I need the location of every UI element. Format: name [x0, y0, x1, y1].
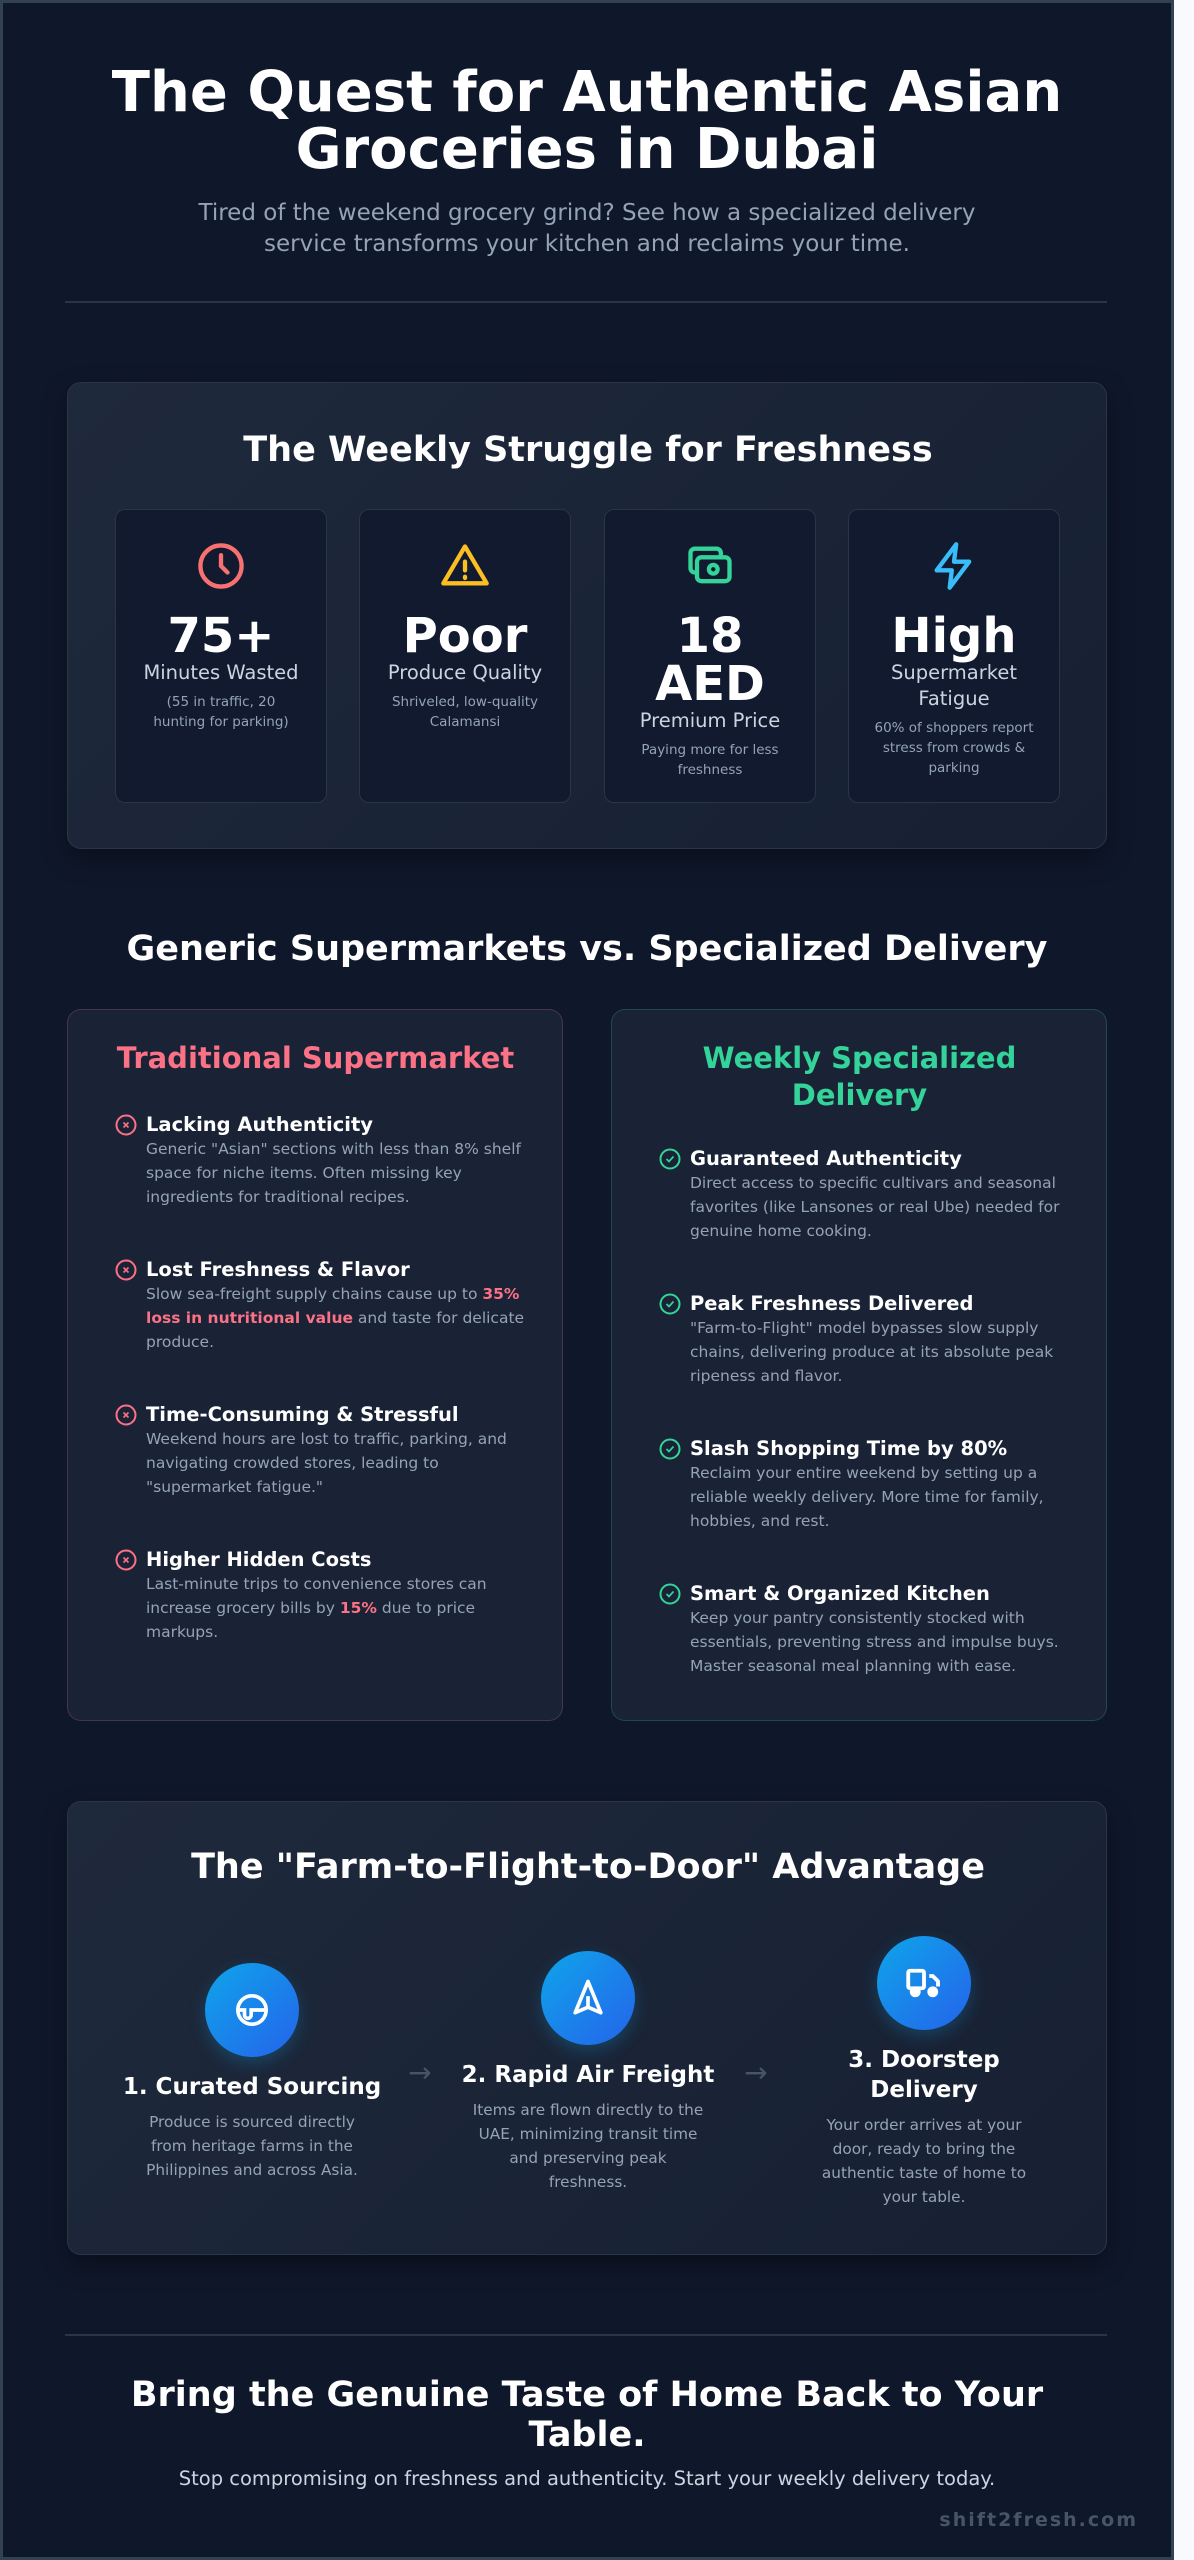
card: minutes wasted: (55 in traffic, 20 [167, 694, 275, 710]
item: hidden costs: Higher Hidden Costs [146, 1548, 372, 1571]
step 2: Items are flown directly to the UAE, minimizing transit time and preserving peak freshness. [473, 2100, 703, 2190]
card: supermarket fatigue [848, 509, 1060, 803]
heading: farm to flight: The "Farm-to-Flight-to-Door" Advantage [191, 1847, 985, 1887]
step 2: 2. Rapid Air Freight [462, 2062, 714, 2088]
card: premium price: 18 [677, 608, 743, 664]
card: premium price [604, 509, 816, 803]
icon: sourcing [205, 1962, 299, 2056]
title [112, 60, 1062, 182]
card: minutes wasted: hunting for parking) [153, 714, 289, 730]
card: minutes wasted: Minutes Wasted [143, 661, 299, 684]
item: guaranteed authenticity: Guaranteed Authenticity [690, 1147, 962, 1170]
item: peak freshness: Peak Freshness Delivered [690, 1292, 973, 1315]
step 3 [822, 1936, 1026, 2206]
item: lost freshness: Lost Freshness & Flavor [146, 1258, 410, 1281]
icon: truck [877, 1936, 971, 2030]
card: produce quality: Poor [403, 608, 527, 664]
step 2 [462, 1951, 714, 2190]
step 3: Delivery [870, 2076, 978, 2102]
card: supermarket fatigue: High [891, 608, 1017, 664]
step 1 [123, 1963, 381, 2178]
item: hidden costs: Last-minute trips to convenience stores can increase grocery bills by 15% due to price markups. [146, 1575, 487, 1641]
card: supermarket fatigue: stress from crowds & [883, 740, 1025, 756]
item: guaranteed authenticity: Direct access to specific cultivars and seasonal favorites (like Lansones or real Ube) needed for genuine home cooking. [690, 1174, 1059, 1240]
icon: plane [541, 1950, 635, 2044]
item: lost freshness [116, 1258, 524, 1351]
panel: farm to flight [67, 1801, 1107, 2255]
heading: weekly struggle: The Weekly Struggle for Freshness [243, 430, 933, 470]
item: smart kitchen: Smart & Organized Kitchen [690, 1582, 990, 1605]
item: peak freshness: "Farm-to-Flight" model bypasses slow supply chains, delivering produce at its absolute peak ripeness and flavor. [690, 1319, 1053, 1385]
card: supermarket fatigue: Supermarket Fatigue [891, 661, 1017, 710]
item: time consuming [116, 1403, 507, 1496]
card: premium price: Premium Price [640, 709, 780, 732]
card: premium price: freshness [678, 762, 742, 778]
item: lacking authenticity: Generic "Asian" sections with less than 8% shelf space for niche items. Often missing key ingredients for traditional recipes. [146, 1140, 521, 1206]
step 3: 3. Doorstep [848, 2046, 1000, 2072]
heading: specialized: Weekly Specialized [703, 1041, 1016, 1075]
title: Groceries in Dubai [296, 117, 878, 182]
card: premium price: AED [655, 656, 765, 712]
item: lost freshness: Slow sea-freight supply chains cause up to 35% loss in nutritional value and taste for delicate produce. [146, 1285, 524, 1351]
closing subtitle: Stop compromising on freshness and authenticity. Start your weekly delivery today. [179, 2467, 995, 2490]
arrow 1: → [408, 2056, 432, 2088]
item: time consuming: Time-Consuming & Stressful [146, 1403, 459, 1426]
item: slash time: Reclaim your entire weekend by setting up a reliable weekly delivery. More time for family, hobbies, and rest. [690, 1464, 1044, 1530]
heading: specialized [703, 1041, 1016, 1112]
icon: clock [198, 543, 244, 589]
icon: bolt [934, 542, 972, 590]
item: slash time: Slash Shopping Time by 80% [690, 1437, 1007, 1460]
card: premium price: Paying more for less [641, 742, 779, 758]
item: smart kitchen [660, 1582, 1059, 1675]
card: produce quality: Shriveled, low-quality Calamansi [392, 694, 538, 730]
arrow 2: → [744, 2056, 768, 2088]
closing heading: Bring the Genuine Taste of Home Back to Your Table. [131, 2375, 1043, 2455]
card: minutes wasted [115, 509, 327, 803]
panel: specialized delivery [611, 1009, 1107, 1721]
item: slash time [660, 1437, 1044, 1530]
watermark: shift2fresh.com [939, 2509, 1138, 2531]
panel: weekly struggle [67, 382, 1107, 849]
icon: warning [441, 544, 489, 586]
item: time consuming: Weekend hours are lost to traffic, parking, and navigating crowded stores, leading to "supermarket fatigue." [146, 1430, 507, 1496]
heading: specialized: Delivery [792, 1078, 927, 1112]
card: supermarket fatigue: 60% of shoppers report [874, 720, 1034, 736]
card: supermarket fatigue: parking [928, 760, 980, 776]
step 1: 1. Curated Sourcing [123, 2074, 381, 2100]
item: guaranteed authenticity [660, 1147, 1060, 1240]
icon: money [688, 546, 732, 584]
card: minutes wasted: 75+ [167, 608, 274, 664]
item: lacking authenticity [116, 1113, 522, 1206]
panel: traditional supermarket [67, 1009, 563, 1721]
item: lacking authenticity: Lacking Authenticity [146, 1113, 373, 1136]
item: peak freshness [660, 1292, 1053, 1385]
subtitle: Tired of the weekend grocery grind? See how a specialized delivery service transforms your kitchen and reclaims your time. [198, 200, 976, 257]
item: hidden costs [116, 1548, 487, 1641]
title: The Quest for Authentic Asian [112, 60, 1062, 125]
card: produce quality: Produce Quality [388, 661, 542, 684]
step 3: Your order arrives at your door, ready to bring the authentic taste of home to your table. [822, 2116, 1026, 2206]
heading: traditional: Traditional Supermarket [117, 1041, 514, 1075]
card: produce quality [359, 509, 571, 803]
item: smart kitchen: Keep your pantry consistently stocked with essentials, preventing stress and impulse buys. Master seasonal meal planning with ease. [690, 1609, 1059, 1675]
step 1: Produce is sourced directly from heritage farms in the Philippines and across Asia. [146, 2112, 358, 2178]
heading: comparison: Generic Supermarkets vs. Specialized Delivery [127, 929, 1047, 969]
